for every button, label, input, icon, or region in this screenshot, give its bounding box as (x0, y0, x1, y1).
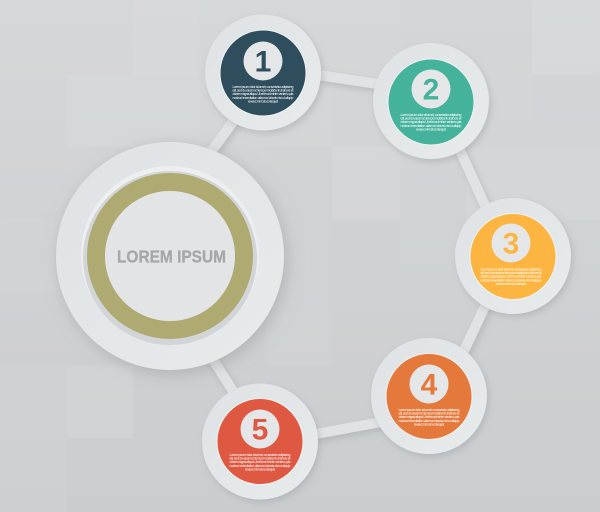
node 1: ex ea commodo consequat (248, 99, 278, 103)
node 1: elit, sed do eiusmod tempor incididunt ut labore et (232, 89, 294, 93)
node 1: Lorem ipsum dolor sit amet, consectetur adipiscing (232, 85, 294, 89)
node 5: dolore magna aliqua. Ut enim ad minim veniam, quis (230, 460, 291, 464)
node 4: 4 (421, 368, 438, 402)
node 3: ex ea commodo consequat (496, 282, 526, 286)
node 4: elit, sed do eiusmod tempor incididunt ut labore et (398, 412, 460, 416)
central title: LOREM IPSUM (117, 246, 226, 266)
node 5: 5 (252, 414, 268, 446)
node 4: dolore magna aliqua. Ut enim ad minim veniam, quis (398, 415, 460, 419)
node 3: 3 (503, 228, 519, 260)
node 1: dolore magna aliqua. Ut enim ad minim veniam, quis (232, 92, 294, 96)
node 3: Lorem ipsum dolor sit amet, consectetur adipiscing (480, 268, 542, 272)
node 2: Lorem ipsum dolor sit amet, consectetur adipiscing (400, 113, 462, 117)
node 1: nostrud exercitation ullamco laboris nisi ut aliquip (232, 96, 294, 100)
node 5 (202, 384, 318, 500)
node 4 (371, 338, 487, 454)
node 4: ex ea commodo consequat (414, 422, 444, 426)
node 1: 1 (255, 46, 271, 78)
node 4: nostrud exercitation ullamco laboris nisi ut aliquip (398, 419, 460, 423)
node 2 (373, 43, 489, 159)
central circle (56, 142, 284, 370)
node 3: elit, sed do eiusmod tempor incididunt ut labore et (480, 271, 542, 275)
node 5: elit, sed do eiusmod tempor incididunt ut labore et (230, 457, 291, 461)
node 3: nostrud exercitation ullamco laboris nisi ut aliquip (480, 278, 542, 282)
connector lines (205, 74, 488, 436)
node 3: dolore magna aliqua. Ut enim ad minim veniam, quis (480, 275, 542, 279)
node 2: ex ea commodo consequat (416, 127, 446, 131)
node 1 (205, 14, 321, 130)
node 3 (455, 198, 571, 314)
olive ring (96, 182, 244, 330)
node 2: nostrud exercitation ullamco laboris nisi ut aliquip (400, 124, 462, 128)
node 2: 2 (423, 74, 439, 106)
node 5: Lorem ipsum dolor sit amet, consectetur adipiscing (230, 453, 291, 457)
node 2: dolore magna aliqua. Ut enim ad minim veniam, quis (400, 120, 462, 124)
central disc (105, 191, 235, 321)
node 5: ex ea commodo consequat (245, 467, 275, 471)
node 4: Lorem ipsum dolor sit amet, consectetur adipiscing (398, 408, 460, 412)
node 5: nostrud exercitation ullamco laboris nisi ut aliquip (230, 464, 291, 468)
node 2: elit, sed do eiusmod tempor incididunt ut labore et (400, 117, 462, 121)
